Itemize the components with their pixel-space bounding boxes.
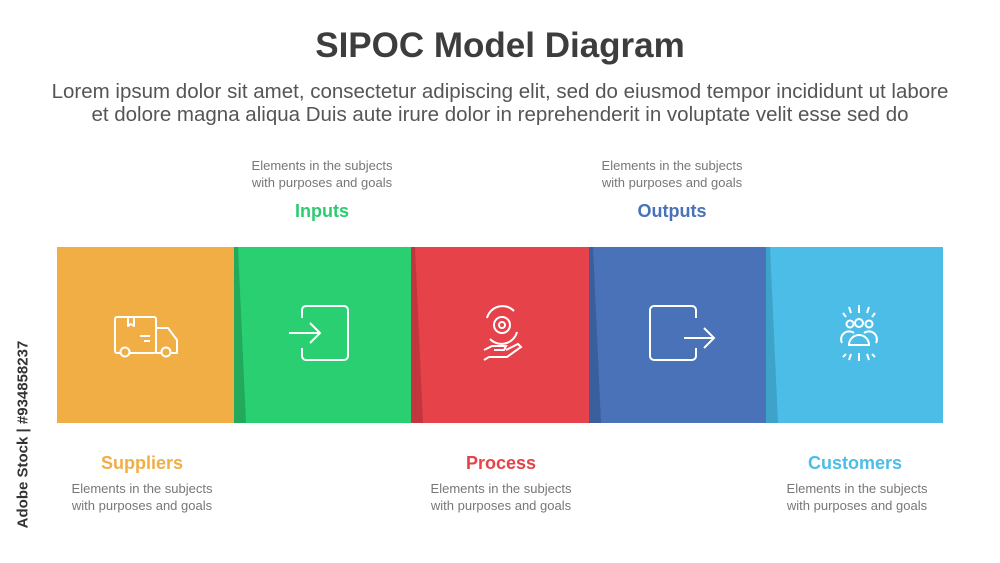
caption: customers: with purposes and goals — [787, 498, 927, 513]
caption: inputs: Elements in the subjects — [252, 158, 392, 173]
label: inputs: Inputs — [295, 201, 349, 221]
icon: truck — [115, 317, 177, 356]
caption: outputs: Elements in the subjects — [602, 158, 742, 173]
label: customers: Customers — [808, 453, 902, 473]
label: suppliers: Suppliers — [101, 453, 183, 473]
caption: process: with purposes and goals — [431, 498, 571, 513]
caption: customers — [786, 481, 927, 513]
caption: suppliers — [72, 481, 212, 513]
watermark side text: Adobe Stock | #934858237 — [14, 341, 32, 528]
caption: suppliers: Elements in the subjects — [72, 481, 212, 496]
box: customers — [766, 247, 943, 423]
caption: process: Elements in the subjects — [431, 481, 571, 496]
box: inputs — [234, 247, 412, 423]
box: suppliers — [57, 247, 235, 423]
subtitle — [52, 80, 948, 126]
box: process — [411, 247, 590, 423]
subtitle: Lorem ipsum dolor sit amet, consectetur adipiscing elit, sed do eiusmod tempor incididunt ut labore — [52, 80, 948, 103]
caption: process — [430, 481, 571, 513]
caption: outputs: with purposes and goals — [602, 175, 742, 190]
caption: outputs — [602, 158, 742, 190]
title: SIPOC Model Diagram — [315, 26, 685, 65]
caption: suppliers: with purposes and goals — [72, 498, 212, 513]
icon: people — [841, 305, 877, 361]
icon: enter — [289, 306, 348, 360]
caption: customers: Elements in the subjects — [787, 481, 927, 496]
label: outputs: Outputs — [638, 201, 706, 221]
label: process: Process — [466, 453, 536, 473]
icon: gear hand — [484, 306, 521, 360]
subtitle: et dolore magna aliqua Duis aute irure dolor in reprehenderit in voluptate velit esse sed do — [91, 103, 909, 126]
box: outputs — [589, 247, 767, 423]
caption: inputs — [252, 158, 392, 190]
caption: inputs: with purposes and goals — [252, 175, 392, 190]
icon: exit — [650, 306, 714, 360]
